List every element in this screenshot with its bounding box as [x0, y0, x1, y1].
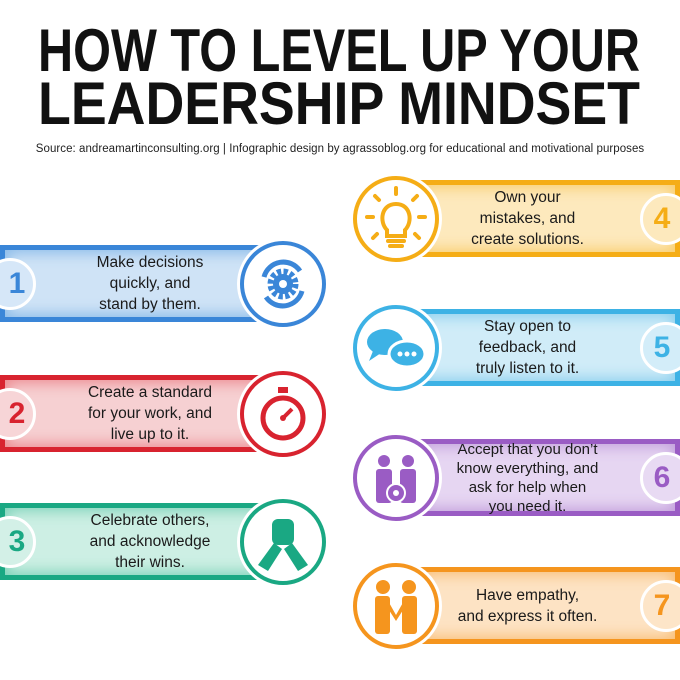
- item 3: [0, 499, 326, 585]
- item 6: Accept that you don’t: [457, 440, 598, 458]
- item 5: Stay open to: [484, 318, 571, 335]
- item 5: [353, 305, 680, 391]
- item 6: you need it.: [489, 498, 566, 514]
- item 3: 3: [9, 525, 25, 558]
- item 3: their wins.: [115, 554, 185, 571]
- item 7: Have empathy,: [476, 586, 579, 604]
- item 5: truly listen to it.: [476, 360, 579, 377]
- item 2: for your work, and: [88, 405, 212, 422]
- item 4: 4: [654, 202, 670, 235]
- item 5: 5: [654, 331, 670, 364]
- item 2: live up to it.: [111, 426, 189, 443]
- item 4: [353, 176, 680, 262]
- item 7: 7: [654, 589, 670, 622]
- item 7: [353, 563, 680, 649]
- item 3: Celebrate others,: [91, 512, 209, 529]
- item 1: stand by them.: [99, 296, 201, 313]
- source line: Source: andreamartinconsulting.org | Infographic design by agrassoblog.org for educational and motivational purposes: [36, 143, 644, 155]
- item 2: Create a standard: [88, 384, 212, 401]
- item 1: Make decisions: [97, 254, 203, 271]
- item 4: create solutions.: [471, 231, 584, 248]
- item 3: and acknowledge: [90, 533, 210, 550]
- title: [38, 17, 640, 135]
- item 6: [353, 435, 680, 521]
- item 2: [0, 371, 326, 457]
- item 6: know everything, and: [457, 460, 598, 476]
- item 4: mistakes, and: [480, 210, 575, 227]
- item 4: Own your: [494, 189, 561, 206]
- item 2: 2: [9, 397, 25, 430]
- item 1: 1: [9, 267, 25, 300]
- item 6: 6: [654, 461, 670, 494]
- item 1: quickly, and: [110, 275, 190, 292]
- item 1: [0, 241, 326, 327]
- item 7: and express it often.: [458, 608, 597, 624]
- item 6: ask for help when: [469, 478, 586, 496]
- item 5: feedback, and: [479, 339, 576, 356]
